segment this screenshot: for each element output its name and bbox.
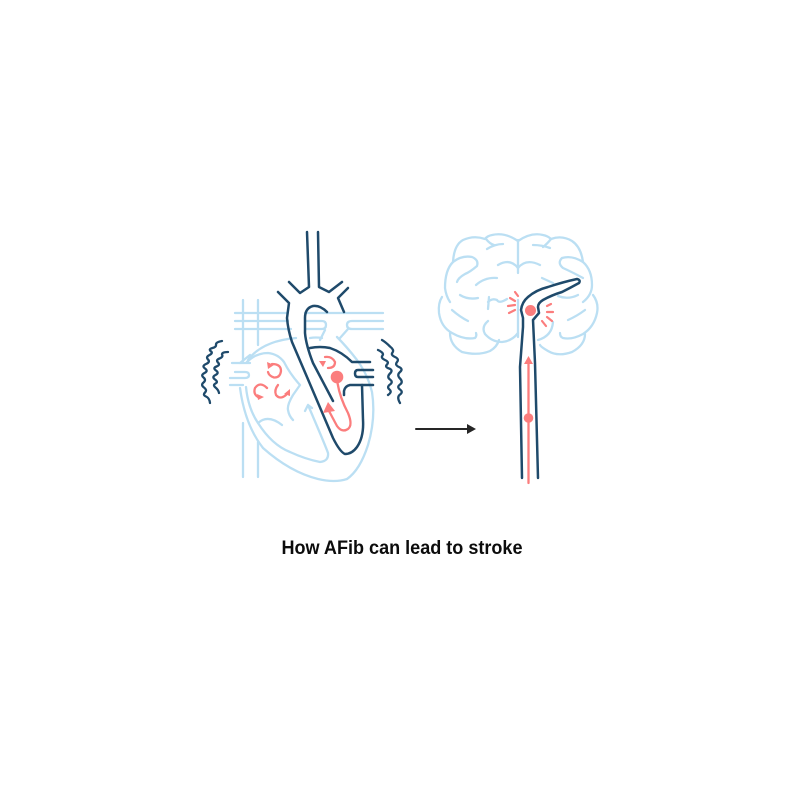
- heart: light blue anatomy: [230, 300, 383, 481]
- heart: red arrowheads: [257, 361, 326, 400]
- brain: [439, 234, 598, 354]
- title: How AFib can lead to stroke: [281, 538, 523, 559]
- brain artery: dark outline: [520, 279, 580, 478]
- red artery flow with arrow and clot: [524, 356, 533, 483]
- heart: dark vessel outline: [278, 232, 373, 454]
- arrow: [416, 424, 476, 434]
- stroke site: clot and burst: [508, 292, 553, 326]
- heart: left wavy lines: [202, 341, 228, 403]
- heart: right wavy lines: [378, 340, 402, 403]
- heart: red swirl arrows: [254, 357, 335, 398]
- heart: red clot and flow path: [323, 371, 350, 430]
